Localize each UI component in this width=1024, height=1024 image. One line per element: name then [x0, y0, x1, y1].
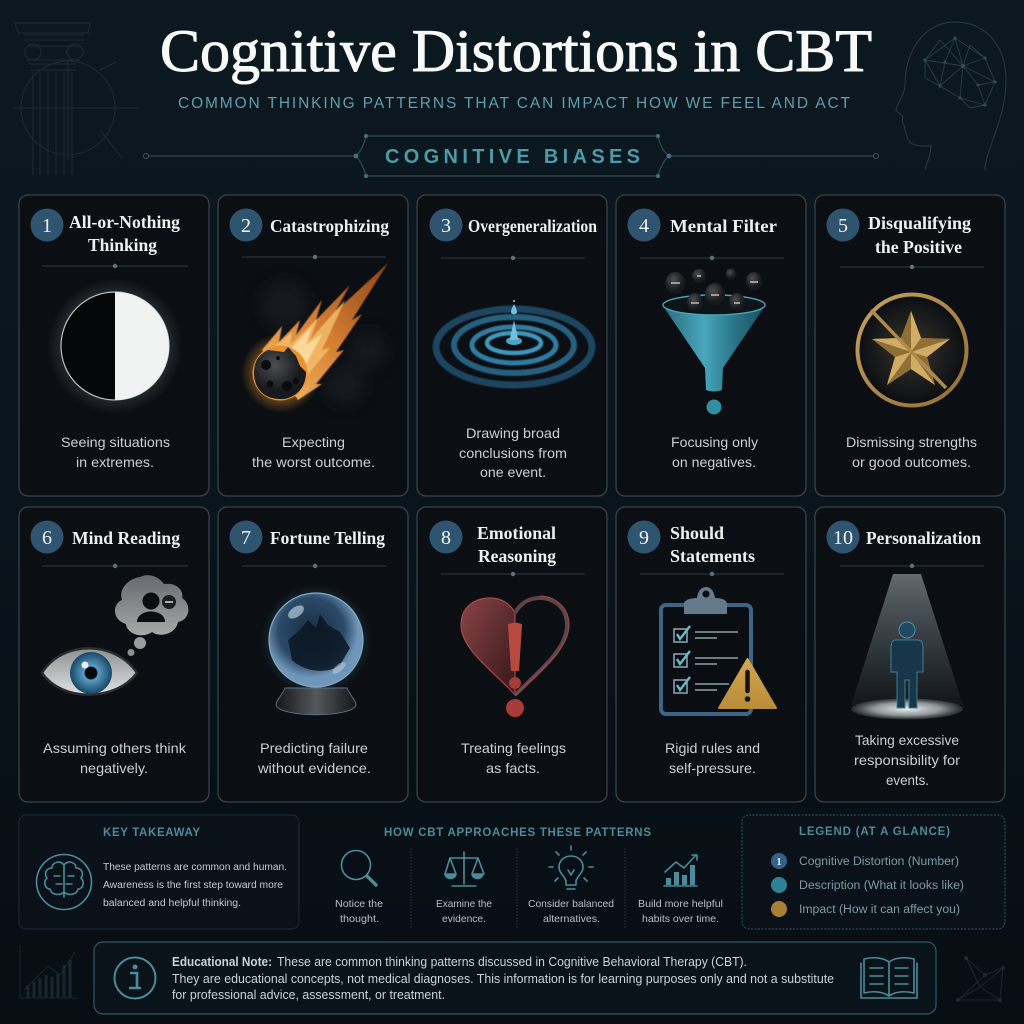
panel: key takeaway: Awareness is the first step toward more: [103, 880, 283, 891]
icon: clipboard with warning triangle: [661, 587, 776, 714]
panel: 9 should statements: Statements: [670, 546, 755, 566]
panel: educational note: Educational Note:: [172, 955, 272, 969]
icon: half black half white circle: [47, 278, 183, 414]
panel: key takeaway: KEY TAKEAWAY: [103, 827, 200, 839]
panel: legend: LEGEND (AT A GLANCE): [799, 826, 950, 838]
panel: how CBT approaches these patterns: [335, 827, 723, 928]
panel: 3 overgeneralization: [417, 195, 607, 496]
panel: 2 catastrophizing: Catastrophizing: [270, 216, 389, 236]
panel: 4 mental filter: Focusing only: [671, 434, 758, 450]
panel: 7 fortune telling: Predicting failure: [260, 740, 368, 756]
panel: how CBT approaches these patterns: thought.: [340, 913, 379, 925]
panel: 9 should statements: Rigid rules and: [665, 740, 760, 756]
panel: how CBT approaches these patterns: Notice the: [335, 898, 383, 910]
panel: 10 personalization: responsibility for: [854, 752, 960, 768]
title: Cognitive Distortions in CBT: [160, 18, 872, 84]
panel: 10 personalization: 10: [833, 527, 853, 549]
panel: 1 all-or-nothing thinking: in extremes.: [76, 454, 154, 470]
panel: legend: [742, 815, 1005, 929]
panel: 5 disqualifying the positive: Dismissing strengths: [846, 434, 977, 450]
panel: how CBT approaches these patterns: habits over time.: [642, 913, 719, 925]
panel: educational note: for professional advice, assessment, or treatment.: [172, 988, 445, 1002]
panel: 3 overgeneralization: Drawing broad: [466, 425, 560, 441]
panel: 7 fortune telling: Fortune Telling: [270, 528, 385, 548]
panel: legend: Cognitive Distortion (Number): [799, 856, 959, 868]
panel: 3 overgeneralization: conclusions from: [459, 445, 567, 461]
icon: person in spotlight: [851, 574, 963, 720]
panel: key takeaway: These patterns are common and human.: [103, 862, 287, 873]
panel: how CBT approaches these patterns: Build more helpful: [638, 898, 723, 910]
panel: 4 mental filter: 4: [639, 215, 649, 237]
panel: 2 catastrophizing: [218, 195, 408, 496]
decoration: head with neural brain: [896, 22, 1006, 170]
decoration: faint network: [956, 956, 1005, 1002]
panel: 9 should statements: self-pressure.: [669, 760, 756, 776]
panel: 6 mind reading: Assuming others think: [43, 740, 187, 756]
decoration: classical column: [14, 23, 138, 175]
panel: how CBT approaches these patterns: HOW CBT APPROACHES THESE PATTERNS: [384, 827, 651, 839]
panel: 10 personalization: Taking excessive: [855, 732, 959, 748]
icon: flaming meteor: [241, 263, 388, 413]
icon: brain in circle: [36, 854, 92, 910]
panel: 5 disqualifying the positive: 5: [838, 215, 848, 237]
panel: 2 catastrophizing: Expecting: [282, 434, 345, 450]
icon: open book: [861, 958, 917, 998]
panel: 3 overgeneralization: Overgeneralization: [468, 216, 597, 236]
panel: key takeaway: balanced and helpful thinking.: [103, 898, 241, 909]
panel: 8 emotional reasoning: [417, 507, 607, 802]
panel: how CBT approaches these patterns: Consider balanced: [528, 898, 614, 910]
panel: legend: Impact (How it can affect you): [799, 904, 960, 916]
panel: 3 overgeneralization: 3: [441, 215, 451, 237]
panel: 4 mental filter: Mental Filter: [670, 216, 777, 236]
decoration: faint bar chart: [20, 945, 78, 998]
panel: 9 should statements: [616, 507, 806, 802]
panel: 8 emotional reasoning: Reasoning: [478, 546, 556, 566]
panel: how CBT approaches these patterns: evidence.: [442, 913, 486, 925]
panel: 1 all-or-nothing thinking: Seeing situations: [61, 434, 170, 450]
panel: 4 mental filter: [616, 195, 806, 496]
panel: 10 personalization: [815, 507, 1005, 802]
panel: 7 fortune telling: 7: [241, 527, 251, 549]
panel: 8 emotional reasoning: Treating feelings: [461, 740, 566, 756]
icon: growth chart: [664, 855, 697, 886]
icon: info circle: [114, 958, 156, 998]
icon: water ripples: [436, 300, 592, 385]
panel: 5 disqualifying the positive: [815, 195, 1005, 496]
panel: 5 disqualifying the positive: Disqualifying: [868, 213, 971, 233]
panel: 6 mind reading: Mind Reading: [72, 528, 180, 548]
panel: legend: 1: [776, 857, 782, 868]
panel: 8 emotional reasoning: 8: [441, 527, 451, 549]
panel: 1 all-or-nothing thinking: Thinking: [88, 235, 157, 255]
panel: 10 personalization: Personalization: [866, 528, 981, 548]
panel: 1 all-or-nothing thinking: 1: [42, 215, 52, 237]
icon: lightbulb: [549, 846, 593, 889]
panel: 5 disqualifying the positive: the Positive: [875, 237, 962, 257]
icon: magnifying glass: [342, 850, 376, 885]
panel: 2 catastrophizing: 2: [241, 215, 251, 237]
icon: crossed-out gold star: [858, 294, 966, 406]
panel: 3 overgeneralization: one event.: [480, 464, 546, 480]
panel: educational note: [94, 942, 936, 1014]
panel: how CBT approaches these patterns: alternatives.: [543, 913, 600, 925]
icon: crystal ball: [260, 584, 372, 715]
icon: funnel filtering negatives: [663, 268, 765, 414]
panel: 9 should statements: Should: [670, 523, 724, 543]
panel: educational note: These are common thinking patterns discussed in Cognitive Behavioral Therapy (CBT).: [277, 955, 747, 969]
panel: 8 emotional reasoning: as facts.: [486, 760, 540, 776]
panel: legend: Description (What it looks like): [799, 880, 964, 892]
panel: 2 catastrophizing: the worst outcome.: [252, 454, 375, 470]
panel: 7 fortune telling: without evidence.: [257, 760, 371, 776]
icon: half heart with exclamation: [461, 596, 569, 717]
panel: 8 emotional reasoning: Emotional: [477, 523, 556, 543]
panel: 9 should statements: 9: [639, 527, 649, 549]
icon: balance scale: [445, 852, 484, 886]
section banner: cognitive biases: [144, 134, 878, 178]
panel: educational note: They are educational concepts, not medical diagnoses. This information is for learning purposes only and not a substitute: [172, 972, 834, 986]
panel: 5 disqualifying the positive: or good outcomes.: [852, 454, 971, 470]
panel: key takeaway: [19, 815, 299, 929]
subtitle: COMMON THINKING PATTERNS THAT CAN IMPACT HOW WE FEEL AND ACT: [178, 95, 851, 112]
panel: 4 mental filter: on negatives.: [672, 454, 756, 470]
section banner: cognitive biases: COGNITIVE BIASES: [385, 146, 640, 168]
panel: 10 personalization: events.: [886, 772, 929, 788]
panel: 1 all-or-nothing thinking: [19, 195, 209, 496]
panel: 6 mind reading: negatively.: [80, 760, 148, 776]
panel: how CBT approaches these patterns: Examine the: [436, 898, 492, 910]
panel: 7 fortune telling: [218, 507, 408, 802]
panel: 6 mind reading: [19, 507, 209, 802]
icon: eye with thought cloud: [42, 575, 188, 695]
panel: 6 mind reading: 6: [42, 527, 52, 549]
panel: 1 all-or-nothing thinking: All-or-Nothing: [69, 212, 180, 232]
